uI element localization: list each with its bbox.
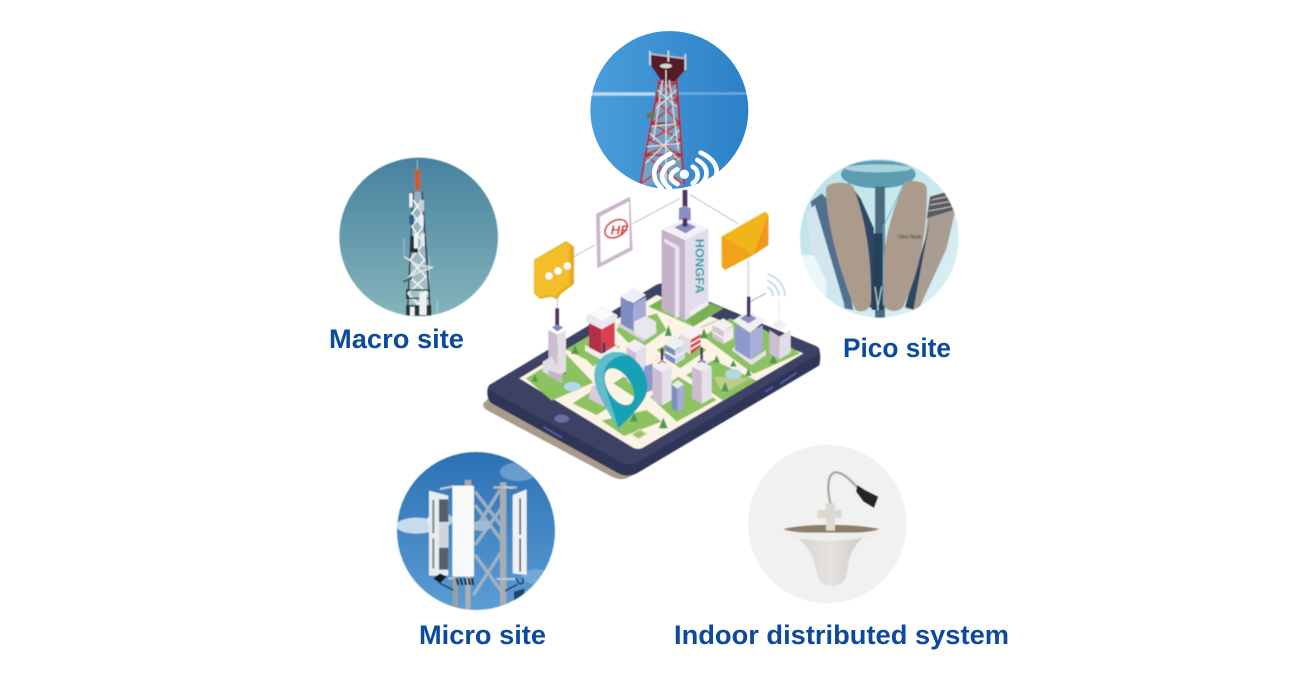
right mauve building [769, 319, 791, 359]
central white towers [588, 339, 712, 412]
striped building [665, 326, 701, 365]
label: indoor distributed system: Indoor distributed system [674, 620, 1009, 650]
icon: wifi arcs [767, 274, 785, 296]
red building [585, 307, 617, 360]
illustration: tablet smart city [483, 190, 820, 479]
tablet body [483, 283, 820, 479]
ponds [564, 369, 742, 391]
button and speaker details [543, 373, 797, 438]
city blocks [526, 290, 800, 436]
white stacked building [712, 318, 733, 344]
trees [532, 325, 777, 428]
blue building [617, 287, 657, 342]
icon: chat bubble [535, 243, 573, 298]
photo: pico site antenna: Ultra Node [898, 234, 922, 240]
tablet screen [519, 295, 803, 449]
text: HF logo: HF [611, 223, 629, 238]
cloud patches [396, 462, 552, 584]
label: pico site: Pico site [843, 333, 951, 363]
right blue tower [732, 297, 766, 365]
photo: indoor ceiling antenna [748, 445, 907, 603]
photo: top communications tower [590, 31, 748, 189]
icon: wifi signal [654, 153, 717, 188]
photo: macro site tower [338, 156, 499, 317]
photo: pico site antenna [800, 158, 959, 318]
text: HONGFA: HONGFA [692, 239, 706, 294]
connection lines [557, 195, 779, 327]
main HONGFA tower [662, 190, 708, 321]
icon: tablet with HF logo [596, 197, 633, 268]
label: micro site: Micro site [419, 620, 546, 650]
icon: location pin [594, 352, 647, 428]
label: macro site: Macro site [329, 324, 464, 354]
left tower [543, 308, 566, 383]
icon: envelope [722, 212, 768, 270]
photo: micro site antennas [396, 451, 556, 611]
